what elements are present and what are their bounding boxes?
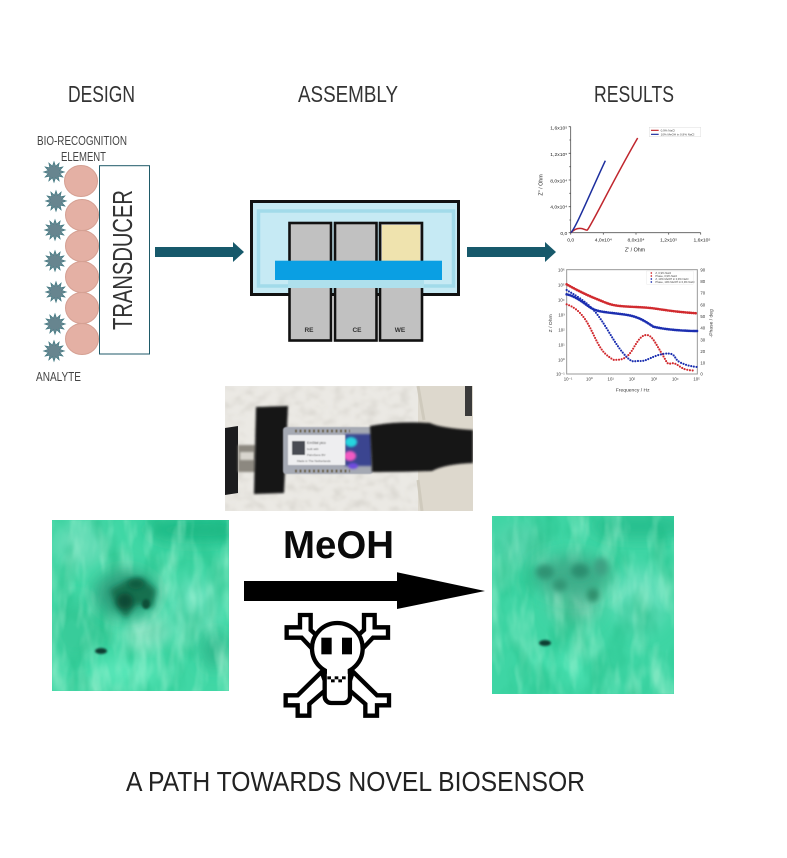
dark stain [95,571,157,617]
legend [649,127,701,137]
y tick labels: 0,0 [560,231,568,237]
series: NaCl [571,138,638,233]
right tick labels: 40 [700,326,706,331]
right tick labels: 80 [700,279,706,284]
right tick labels [700,267,706,377]
legend: 0,9% NaCl [661,128,675,132]
x tick labels: 1,6x10⁵ [693,237,711,243]
right tick labels: 60 [700,302,706,307]
chart: Nyquist plot [539,125,711,253]
inner channel [258,211,454,286]
left tick labels: 10⁰ [558,357,565,362]
bottom tick labels: 10⁵ [693,377,700,382]
bottom tick labels: 10³ [651,377,658,382]
electrode: RE: RE [304,327,314,334]
series: red phase [567,304,695,370]
left tick labels: 10⁵ [558,282,565,287]
surface streak texture [52,520,229,691]
series: blue impedance [567,294,697,331]
title: path towards novel biosensor: A PATH TOWARDS NOVEL BIOSENSOR [126,766,585,797]
legend: Phase, 10% MeOH in 0,9% NaCl [655,280,695,284]
bottom tick labels: 10⁰ [586,377,593,382]
LED lights [345,437,357,447]
left tick labels: 10⁶ [558,267,565,272]
heading: assembly: ASSEMBLY [298,81,398,107]
y tick labels: 8,0x10⁴ [550,178,567,184]
electrode: WE: WE [395,327,406,334]
circuit board: built with [307,447,319,451]
diagram: biosensor design [44,162,150,362]
y tick labels [550,125,568,237]
bio-recognition beads [64,166,98,354]
blue sample strip [275,261,442,280]
right tick labels: 10 [700,361,706,366]
y tick labels: 1,6x10⁵ [550,125,567,131]
left axis title: Z / Ohm [548,314,554,332]
right tick labels: 20 [700,349,706,354]
transducer label: TRANSDUCER [107,190,138,330]
y tick labels: 1,2x10⁵ [550,152,567,158]
left tick labels: 10⁻¹ [556,372,565,377]
frame [567,270,697,374]
bottom tick labels: 10⁴ [672,377,679,382]
label: MeOH: MeOH [283,524,394,567]
legend: Phase, 0,9% NaCl [655,274,677,278]
right axis title: -Phase / deg [709,309,715,337]
x tick labels: 8,0x10⁴ [627,237,645,243]
analyte particles [44,162,66,362]
legend [647,271,695,284]
legend: 10% MeOH in 0,9% NaCl [661,133,695,137]
axis titles: Z' / Ohm [625,247,646,253]
outer cell [252,202,458,294]
label: bio-recognition element [37,133,127,164]
channel overlap [288,279,424,288]
arrow: design to assembly [155,242,244,262]
arrow: assembly to results [467,242,556,262]
right tick labels: 90 [700,267,706,272]
icon: skull and crossbones [286,615,389,716]
circuit board: PalmSens BV [307,453,326,457]
heading: design: DESIGN [68,81,135,107]
x tick labels [567,237,711,243]
legend: Z, 0,9% NaCl [655,271,672,275]
left tick labels: 10¹ [558,342,565,347]
x tick labels: 0,0 [567,237,574,243]
photo: potentiostat device [225,386,473,511]
x axis title: Frequency / Hz [616,388,650,394]
electrode: CE [335,223,376,340]
black tape [254,406,288,494]
legend: Z, 10% MeOH in 0,9% NaCl [655,277,689,281]
infographic canvas [36,86,714,792]
series: red impedance [567,284,697,313]
bottom tick labels [564,377,700,382]
electrode: RE [290,223,331,340]
axes [569,127,701,235]
diagram: electrode assembly [252,202,458,340]
photo: surface before treatment [52,520,229,691]
electrode: WE [380,223,422,340]
left tick labels: 10² [558,327,565,332]
x tick labels: 4,0x10⁴ [595,237,612,243]
small dark spot [539,640,551,646]
series: blue phase [567,290,697,367]
label: bio-recognition element: ELEMENT [61,149,106,164]
x tick labels: 1,2x10⁵ [660,237,677,243]
y tick labels: 4,0x10⁴ [550,205,567,211]
transducer box [100,166,150,354]
left tick labels: 10⁴ [558,297,565,302]
electrode: CE: CE [352,327,362,334]
left tick labels: 10³ [558,312,565,317]
arrow: MeOH treatment [244,572,485,609]
board label [288,435,345,465]
right tick labels: 0 [700,372,703,377]
right tick labels: 30 [700,337,706,342]
left tick labels [556,267,565,377]
series: MeOH [571,161,605,233]
chart: Bode plot [548,267,715,394]
circuit board: EmStat pico [307,441,326,445]
faded stain [534,556,610,596]
bottom tick labels: 10¹ [608,377,614,382]
right tick labels: 70 [700,291,706,296]
left connector [225,426,238,495]
photo: surface after treatment [492,514,690,694]
bottom tick labels: 10² [629,377,636,382]
notebook edge [465,386,472,416]
right tick labels: 50 [700,314,706,319]
heading: results: RESULTS [594,81,674,107]
circuit board: Made in The Netherlands [297,459,331,463]
USB plug and cable [370,422,473,472]
circuit board [283,427,373,474]
bottom tick labels: 10⁻¹ [564,377,573,382]
label: analyte: ANALYTE [36,369,81,384]
surface streak texture [492,516,674,694]
y axis title: Z'' / Ohm [539,174,545,196]
small dark spot [95,648,107,654]
label: bio-recognition element: BIO-RECOGNITION [37,133,127,148]
